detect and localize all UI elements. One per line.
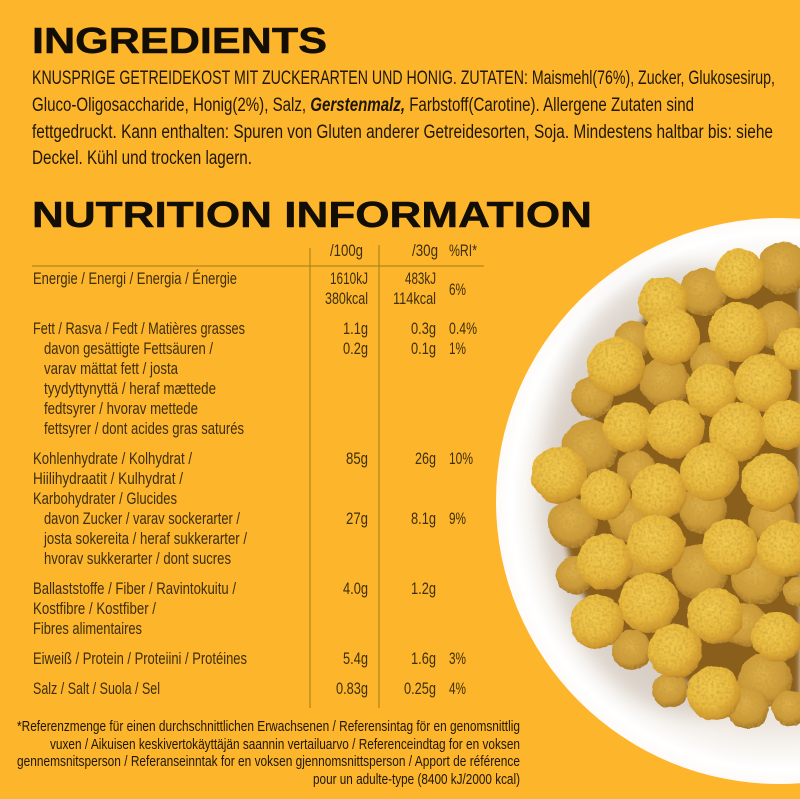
heading: nutrition information: NUTRITION INFORMATION: [32, 194, 592, 235]
row: fibre: [33, 580, 436, 638]
row: fat: 0.1g: [411, 340, 436, 358]
footnote: gennemsnitsperson / Referanseinntak for en voksen gjennomsnittsperson / Apport de référence: [17, 753, 520, 770]
row: energy: [33, 269, 466, 308]
row: energy: 380kcal: [325, 290, 368, 308]
row: salt: 0.25g: [404, 680, 436, 698]
row: energy: 1610kJ: [330, 270, 368, 288]
row: salt: 4%: [449, 680, 466, 698]
photo: cereal bowl: [496, 218, 800, 784]
row: protein: 3%: [449, 650, 466, 668]
table rules: [32, 245, 484, 708]
row: energy: 6%: [449, 281, 466, 299]
row: carbohydrates: 8.1g: [411, 510, 436, 528]
row: fat: [33, 320, 477, 438]
bowl inner shadow: [540, 265, 800, 715]
footnote: vuxen / Aikuisen keskivertokäyttäjän saannin vertailuarvo / Referenceindtag for en voksen: [50, 736, 520, 753]
row: carbohydrates: [33, 450, 473, 568]
cereal balls, back layer: [548, 242, 800, 729]
dark gaps between balls: [560, 260, 800, 705]
row: fat: 1.1g: [343, 320, 368, 338]
row: carbohydrates: 26g: [415, 450, 436, 468]
row: energy: 483kJ: [405, 270, 436, 288]
row: carbohydrates: josta sokereita / heraf sukkerarter /: [43, 530, 247, 548]
row: carbohydrates: 85g: [346, 450, 368, 468]
row: fat: davon gesättigte Fettsäuren /: [44, 340, 213, 358]
row: fibre: 4.0g: [343, 580, 368, 598]
table header: %RI*: [449, 242, 477, 260]
footnote: [17, 718, 520, 788]
cereal balls, front layer: [531, 249, 800, 720]
row: fat: varav mättat fett / josta: [44, 360, 179, 378]
row: protein: Eiweiß / Protein / Proteiini / Protéines: [33, 650, 247, 668]
row: salt: Salz / Salt / Suola / Sel: [33, 680, 160, 698]
row: salt: 0.83g: [336, 680, 368, 698]
row: fibre: Kostfibre / Kostfiber /: [33, 600, 156, 618]
row: fat: 0.3g: [411, 320, 436, 338]
row: protein: 1.6g: [411, 650, 436, 668]
row: fat: fedtsyrer / hvorav mettede: [44, 400, 198, 418]
ingredients text: Deckel. Kühl und trocken lagern.: [32, 148, 252, 169]
row: fibre: Fibres alimentaires: [33, 620, 142, 638]
row: carbohydrates: Hiilihydraatit / Kulhydrat /: [33, 470, 183, 488]
row: protein: 5.4g: [343, 650, 368, 668]
heading: ingredients: INGREDIENTS: [32, 20, 327, 61]
nutrition table: [32, 242, 484, 708]
row: salt: [33, 680, 466, 698]
row: energy: 114kcal: [393, 290, 436, 308]
row: fat: 0.4%: [449, 320, 477, 338]
row: protein: [33, 650, 466, 668]
table header: /100g: [330, 242, 363, 260]
row: carbohydrates: 9%: [449, 510, 466, 528]
row: carbohydrates: 10%: [449, 450, 473, 468]
row: carbohydrates: 27g: [346, 510, 368, 528]
row: carbohydrates: davon Zucker / varav sockerarter /: [44, 510, 240, 528]
bowl: [496, 218, 800, 784]
row: fibre: 1.2g: [411, 580, 436, 598]
ingredients text: [32, 68, 775, 169]
row: fat: fettsyrer / dont acides gras saturés: [44, 420, 244, 438]
row: energy: Energie / Energi / Energia / Énergie: [33, 269, 237, 288]
row: carbohydrates: Karbohydrater / Glucides: [33, 490, 177, 508]
footnote: pour un adulte-type (8400 kJ/2000 kcal): [313, 771, 520, 788]
table header: /30g: [412, 242, 438, 260]
row: fat: Fett / Rasva / Fedt / Matières grasses: [33, 320, 245, 338]
row: fat: tyydyttynyttä / heraf mættede: [44, 380, 216, 398]
row: fat: 0.2g: [343, 340, 368, 358]
footnote: *Referenzmenge für einen durchschnittlichen Erwachsenen / Referensintag för en genomsnittlig: [17, 718, 520, 735]
row: fat: 1%: [449, 340, 466, 358]
row: fibre: Ballaststoffe / Fiber / Ravintokuitu /: [33, 580, 236, 598]
ingredients text: Gluco-Oligosaccharide, Honig(2%), Salz, Gerstenmalz, Farbstoff(Carotine). Allergene Zutaten sind: [32, 95, 694, 116]
row: carbohydrates: Kohlenhydrate / Kolhydrat /: [33, 450, 192, 468]
table header: [330, 242, 477, 260]
row: carbohydrates: hvorav sukkerarter / dont sucres: [44, 550, 231, 568]
